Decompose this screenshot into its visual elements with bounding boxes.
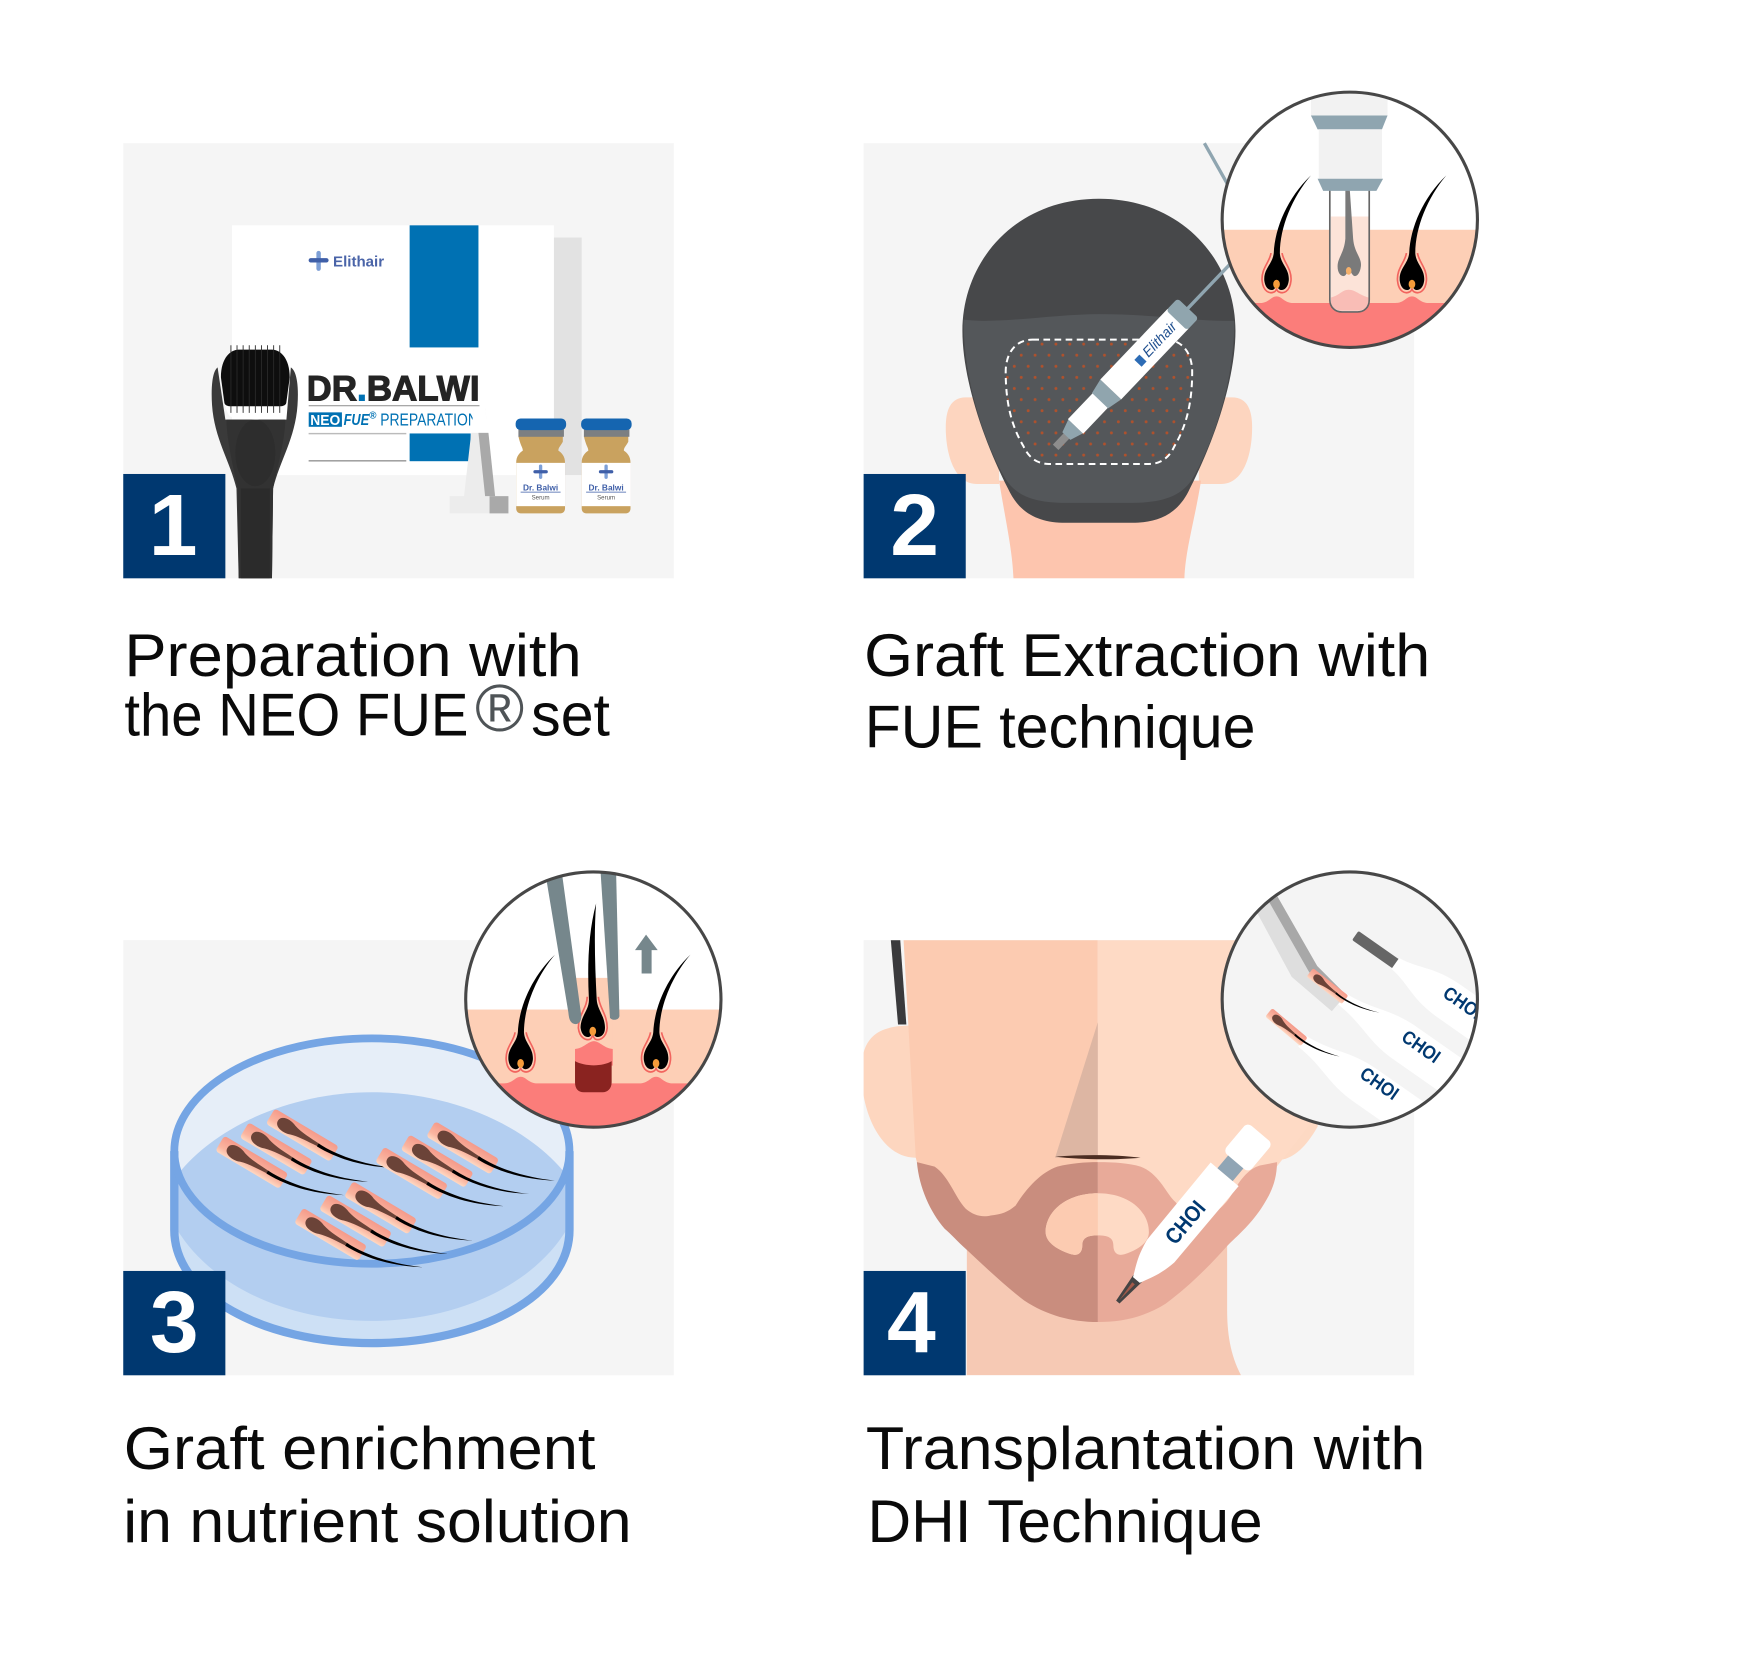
heading: step 1: the NEO FUE — [124, 681, 468, 748]
heading: step 4 — [866, 1415, 1425, 1555]
heading: step 1: set — [531, 681, 610, 748]
heading: step 1: Preparation with — [124, 622, 582, 689]
icon: beard — [917, 1162, 1277, 1322]
icon: ears — [861, 1026, 1318, 1160]
icon: left follicle — [1262, 175, 1311, 293]
icon: pen top right — [1352, 932, 1476, 1040]
logo: Elithair — [309, 251, 384, 271]
icon: mouth — [1055, 1155, 1141, 1159]
box title: NEO — [310, 412, 341, 429]
icon: ears and neck — [946, 397, 1252, 578]
heading: step 1 — [124, 622, 610, 748]
heading: step 2: FUE technique — [865, 694, 1255, 761]
badge: number 4 — [864, 1271, 966, 1375]
heading: step 2 — [864, 622, 1430, 761]
icon: derma roller — [212, 345, 298, 578]
badge: number 2 — [864, 474, 966, 578]
icon: face halves — [904, 940, 1282, 1216]
icon: pen lower — [1298, 1036, 1423, 1122]
badge: number 4: 4 — [887, 1273, 936, 1371]
heading: step 4: DHI Technique — [868, 1488, 1263, 1555]
badge: number 1 — [123, 474, 225, 578]
icon: applicator — [450, 408, 508, 513]
heading: step 4: Transplantation with — [866, 1415, 1425, 1482]
logo: Elithair: Elithair — [333, 253, 384, 270]
panel: step 2 graft extraction — [864, 89, 1487, 578]
box title: PREPARATION — [380, 410, 478, 430]
badge: number 3 — [123, 1271, 225, 1375]
icon: punch tool — [1311, 89, 1388, 191]
heading: step 3: in nutrient solution — [123, 1488, 632, 1555]
icon: sideburn — [891, 940, 906, 1025]
icon: CHOI pen — [1103, 1121, 1274, 1313]
panel: step 4 transplantation — [864, 870, 1479, 1376]
graft held by forceps — [1307, 968, 1379, 1012]
badge: number 2: 2 — [890, 476, 939, 574]
magnifier circle: enrichment — [464, 871, 724, 1132]
icon: pen upper: CHOI — [1398, 1026, 1445, 1067]
icon: tweezers — [545, 871, 619, 1024]
icon: pen top right: CHOI — [1439, 982, 1486, 1023]
icon: neck — [967, 1221, 1241, 1375]
panel: step 3 graft enrichment — [123, 871, 724, 1375]
graft in pen tip — [1266, 1009, 1340, 1056]
badge: number 3: 3 — [150, 1273, 199, 1371]
icon: right follicle — [1397, 175, 1446, 293]
icon: chin cutout — [1046, 1193, 1149, 1255]
connector lines — [1186, 143, 1232, 311]
icon: pen upper — [1338, 994, 1461, 1090]
icon: right follicle — [642, 955, 690, 1072]
badge: number 1: 1 — [149, 476, 198, 574]
icon: pen lower: CHOI — [1356, 1063, 1403, 1104]
grafts in solution — [215, 1100, 555, 1291]
icon: left follicle — [506, 955, 555, 1072]
icon: extraction tube with graft — [1330, 190, 1369, 312]
icon: extraction pen — [1045, 298, 1199, 457]
icon: vial 2: Serum — [597, 494, 615, 501]
icon: forceps — [1261, 899, 1343, 1005]
icon: petri dish — [174, 1038, 569, 1343]
icon: vial 2: Dr. Balwi — [589, 483, 624, 493]
icon: vial 2 — [581, 418, 632, 513]
icon: up arrow — [635, 935, 658, 973]
icon: vial 1: Dr. Balwi — [523, 483, 558, 493]
icon: lifted graft — [575, 904, 613, 1092]
illustration: face — [861, 940, 1321, 1375]
icon: CHOI pen: CHOI — [1160, 1196, 1211, 1249]
heading: step 1: ® — [475, 672, 524, 746]
icon: vial 1 — [516, 418, 566, 513]
box title — [308, 376, 480, 427]
box title: ® — [369, 410, 377, 421]
donor area — [1006, 340, 1192, 464]
box title: FUE — [344, 412, 370, 429]
magnifier circle: implantation — [1220, 870, 1479, 1129]
box title: DR.BALWI — [306, 370, 480, 409]
icon: vial 1: Serum — [532, 494, 550, 501]
panel: step 1 preparation — [123, 143, 674, 578]
magnifier circle: extraction — [1221, 89, 1487, 355]
icon: nose shadow — [1055, 1022, 1098, 1158]
heading: step 3: Graft enrichment — [124, 1415, 596, 1482]
product box — [232, 225, 582, 475]
heading: step 3 — [123, 1415, 632, 1555]
icon: head with hair — [962, 199, 1235, 523]
heading: step 2: Graft Extraction with — [864, 622, 1430, 689]
icon: extraction pen: Elithair — [1140, 318, 1181, 361]
